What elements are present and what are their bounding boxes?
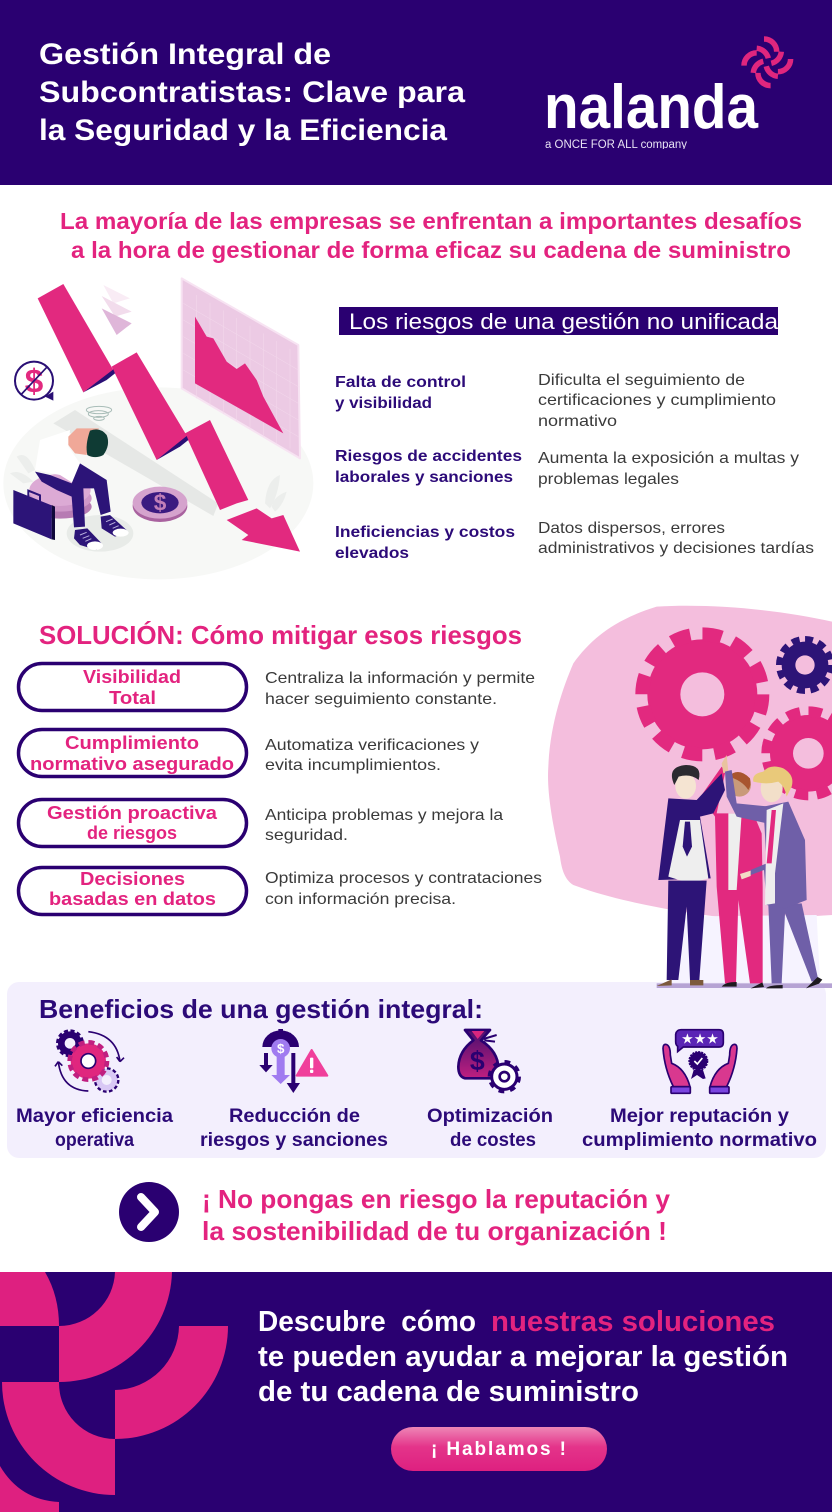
risk 2: accidents: problemas legales <box>538 471 679 488</box>
header band <box>0 0 832 185</box>
solution 3: Gestión proactiva <box>47 802 218 823</box>
risk 2: accidents: Aumenta la exposición a multas y <box>538 450 799 467</box>
benefit: risk reduction <box>200 1106 388 1151</box>
solution 1: hacer seguimiento constante. <box>265 691 497 708</box>
solution 2: evita incumplimientos. <box>265 757 441 774</box>
person: navy suit <box>657 755 728 986</box>
icon: reputation hands <box>663 1030 737 1093</box>
solution 4: con información precisa. <box>265 891 456 908</box>
benefit: cost optimisation <box>427 1106 553 1151</box>
solution 4: Decisiones <box>80 868 185 889</box>
solution 2 <box>18 730 479 776</box>
benefit: reputation: Mejor reputación y <box>610 1106 789 1127</box>
gear: navy <box>779 639 831 691</box>
subheading: a la hora de gestionar de forma eficaz su cadena de suministro <box>71 237 791 263</box>
worried person <box>13 428 133 552</box>
risk 1: control: certificaciones y cumplimiento <box>538 392 776 409</box>
subheading: La mayoría de las empresas se enfrentan a importantes desafíos <box>60 208 802 234</box>
benefit: efficiency: Mayor eficiencia <box>16 1106 173 1127</box>
solution 2: normativo asegurado <box>30 753 234 774</box>
button <box>391 1427 607 1471</box>
icon: money bag: $ <box>470 1046 485 1076</box>
icon: risk reduction <box>259 1029 327 1093</box>
title: Subcontratistas: Clave para <box>39 76 465 109</box>
icon: no dollar: $ <box>25 364 44 401</box>
solution 2: Cumplimiento <box>65 732 199 753</box>
footer pattern <box>0 1272 228 1512</box>
solution 4: basadas en datos <box>49 888 216 909</box>
solution 1: Visibilidad <box>83 666 181 687</box>
seat stack <box>28 474 92 519</box>
icon: reputation hands: ★★★ <box>681 1031 719 1047</box>
icon: dizzy squiggle <box>86 406 112 420</box>
gear: pink right <box>767 712 832 795</box>
person: pink suit <box>702 767 763 983</box>
icon: chevron button <box>119 1182 179 1242</box>
footer message: Descubre cómo <box>258 1306 476 1338</box>
chart panel <box>182 278 300 458</box>
solution 3 <box>18 800 503 846</box>
risk 1: control: y visibilidad <box>335 395 432 412</box>
benefit: cost optimisation: de costes <box>450 1130 536 1151</box>
benefits heading: Beneficios de una gestión integral: <box>39 994 483 1024</box>
risk 2: accidents: laborales y sanciones <box>335 469 513 486</box>
benefit: cost optimisation: Optimización <box>427 1106 553 1127</box>
benefit: reputation: cumplimiento normativo <box>582 1130 817 1151</box>
coin: $ <box>154 490 167 516</box>
title <box>39 38 465 147</box>
icon: gears <box>55 1031 124 1092</box>
risk 3: inefficiency: Datos dispersos, errores <box>538 520 725 537</box>
call to action text: ¡ No pongas en riesgo la reputación y <box>202 1184 671 1214</box>
logo: nalanda <box>544 39 791 151</box>
benefit: efficiency: operativa <box>55 1130 134 1151</box>
solution heading: SOLUCIÓN: Cómo mitigar esos riesgos <box>39 620 522 650</box>
risk 3: inefficiency: Ineficiencias y costos <box>335 524 515 541</box>
coin <box>133 487 187 522</box>
solution 1 <box>18 664 535 710</box>
icon: risk reduction: $ <box>277 1041 285 1056</box>
risk 1: control <box>335 372 776 430</box>
person: lavender suit <box>722 766 822 988</box>
falling arrow <box>38 284 300 552</box>
risk 2: accidents: Riesgos de accidentes <box>335 448 522 465</box>
panel: footer <box>0 1272 832 1512</box>
subheading <box>60 208 802 263</box>
benefit: efficiency <box>16 1106 173 1151</box>
solution 4: Optimiza procesos y contrataciones <box>265 870 542 887</box>
footer message: de tu cadena de suministro <box>258 1376 639 1408</box>
small triangles <box>102 285 132 335</box>
solution 2: Automatiza verificaciones y <box>265 737 479 754</box>
solution 1: Centraliza la información y permite <box>265 670 535 687</box>
risk 3: inefficiency: elevados <box>335 545 409 562</box>
solution 3: seguridad. <box>265 827 348 844</box>
solution 3: de riesgos <box>87 822 177 843</box>
solution 3: Anticipa problemas y mejora la <box>265 807 503 824</box>
footer message: te pueden ayudar a mejorar la gestión <box>258 1341 788 1373</box>
risk 3: inefficiency: administrativos y decisiones tardías <box>538 540 814 557</box>
footer message: nuestras soluciones <box>491 1306 775 1338</box>
briefcase <box>13 490 55 540</box>
footer message <box>258 1306 788 1408</box>
section label: risks: Los riesgos de una gestión no unificada <box>349 309 779 334</box>
title: la Seguridad y la Eficiencia <box>39 114 447 147</box>
risk 1: control: Falta de control <box>335 374 466 391</box>
risk 2: accidents <box>335 448 799 488</box>
call to action text <box>202 1184 671 1246</box>
risk 1: control: Dificulta el seguimiento de <box>538 372 745 389</box>
title: Gestión Integral de <box>39 38 331 71</box>
logo: nalanda: a ONCE FOR ALL company <box>545 139 687 151</box>
shoes <box>74 515 129 550</box>
illustration: team and gears <box>548 606 832 988</box>
benefit: risk reduction: riesgos y sanciones <box>200 1130 388 1151</box>
risk 1: control: normativo <box>538 413 617 430</box>
gear: large pink <box>642 634 762 754</box>
benefit: risk reduction: Reducción de <box>229 1106 360 1127</box>
button: ¡ Hablamos ! <box>431 1439 568 1460</box>
logo: nalanda: nalanda <box>544 73 758 142</box>
icon: no dollar <box>15 362 53 401</box>
plants <box>10 455 287 512</box>
icon: money bag <box>458 1030 519 1091</box>
solution 1: Total <box>109 687 156 708</box>
risk 3: inefficiency <box>335 520 814 562</box>
benefit: reputation <box>582 1106 817 1151</box>
panel: benefits <box>7 982 826 1158</box>
solution 4 <box>18 868 542 914</box>
illustration: falling chart with worried person <box>3 278 313 579</box>
call to action text: la sostenibilidad de tu organización ! <box>202 1216 667 1246</box>
